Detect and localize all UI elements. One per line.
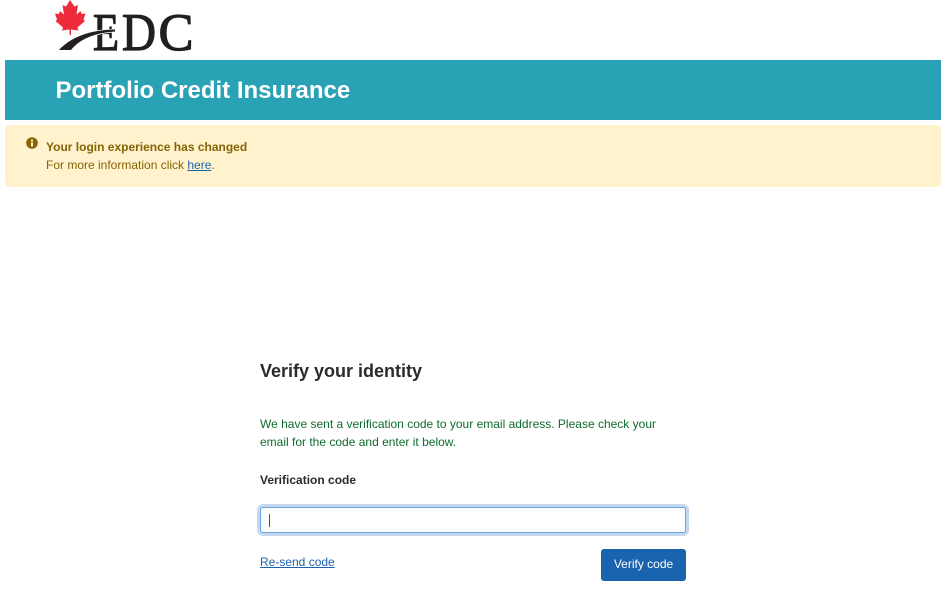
- text cursor: [269, 514, 270, 527]
- button: verify code: Verify code: [614, 557, 673, 571]
- logo: EDC with maple leaf: [55, 0, 194, 52]
- icon: info circle: [26, 137, 38, 149]
- title: Portfolio Credit Insurance: [56, 77, 350, 104]
- alert text: For more information click here.: [46, 158, 215, 172]
- verification message: We have sent a verification code to your email address. Please check your: [260, 417, 656, 431]
- verification message: [260, 417, 656, 449]
- input field: [260, 507, 686, 533]
- alert heading: Your login experience has changed: [46, 140, 247, 154]
- heading: verify your identity: Verify your identity: [260, 361, 422, 381]
- logo wordmark: [93, 4, 194, 62]
- logo swoosh: [59, 30, 115, 50]
- icon: red maple leaf: [55, 0, 86, 35]
- verification message: email for the code and enter it below.: [260, 435, 456, 449]
- header banner: [5, 60, 941, 120]
- field label: Verification code: [260, 473, 356, 487]
- link: re-send code: Re-send code: [260, 555, 335, 569]
- alert panel: [5, 125, 941, 187]
- button: verify code: [601, 549, 686, 581]
